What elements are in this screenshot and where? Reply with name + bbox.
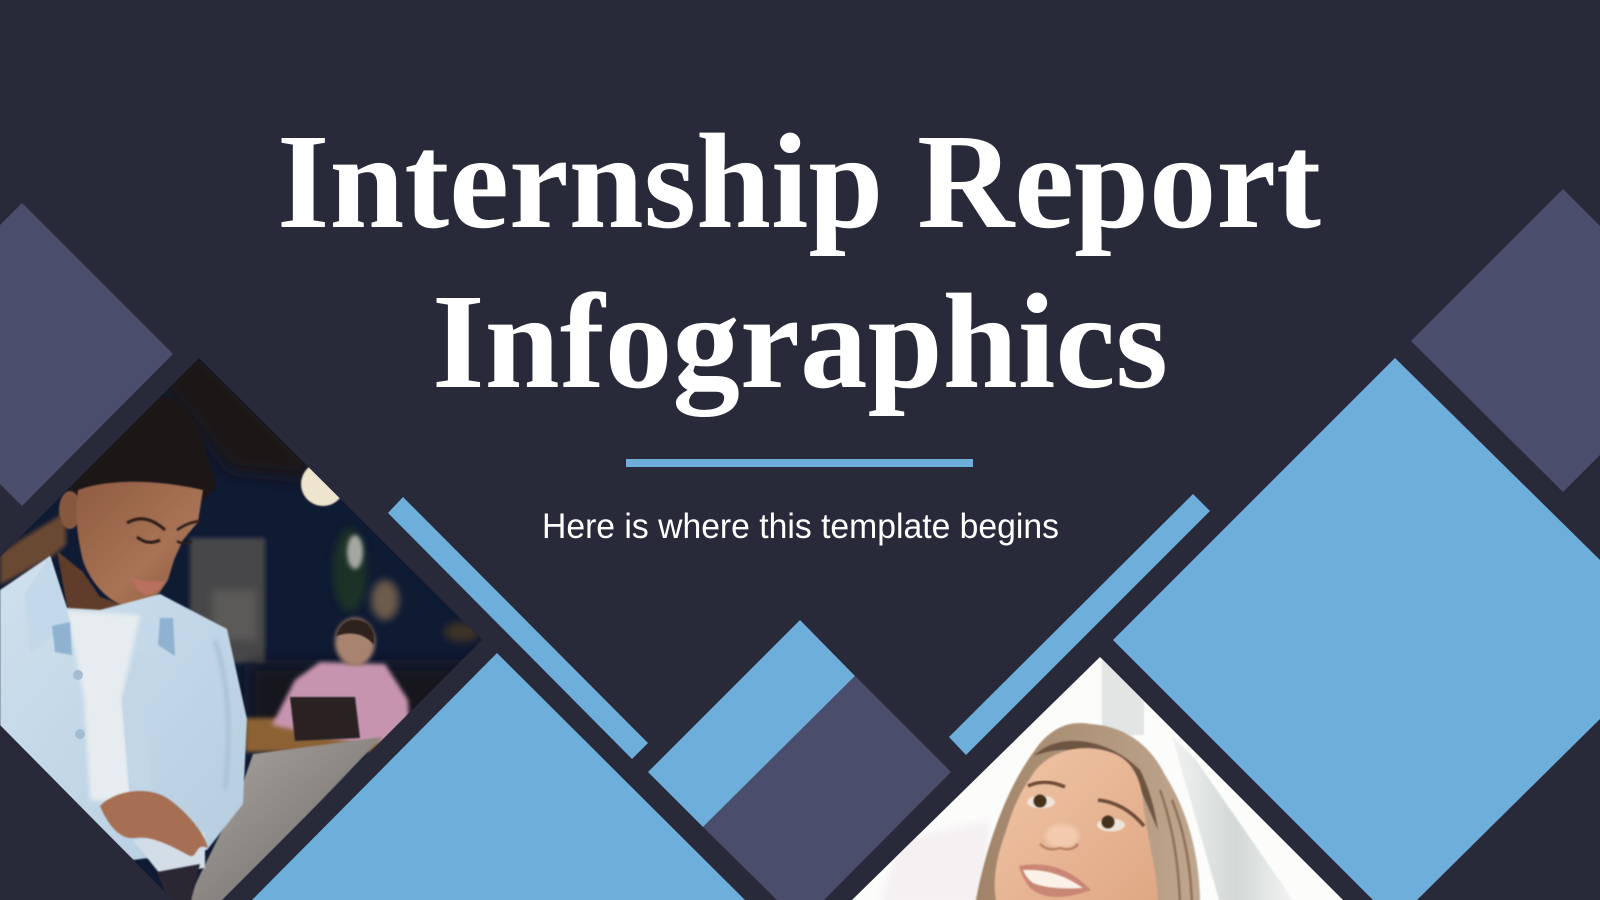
- right blue stripe: [949, 494, 1210, 755]
- right blue diamond: [1113, 358, 1600, 900]
- subtitle: Here is where this template begins: [542, 507, 1059, 546]
- hand: [100, 791, 208, 856]
- face: [76, 482, 203, 606]
- sleeve cuff: [133, 832, 205, 874]
- center blue diamond segment: [648, 620, 855, 827]
- smile: [1019, 864, 1091, 897]
- title underline: [626, 459, 973, 467]
- neck: [57, 552, 122, 611]
- ponytail: [0, 512, 66, 585]
- left purple diamond: [0, 203, 173, 506]
- hair: [60, 397, 217, 520]
- face: [995, 748, 1158, 900]
- title line 2: Infographics: [432, 267, 1168, 417]
- shirt: [0, 556, 247, 860]
- title: [277, 107, 1321, 417]
- right purple diamond: [1411, 189, 1600, 492]
- title line 1: Internship Report: [277, 107, 1321, 257]
- ear: [59, 491, 81, 529]
- photo: woman working at laptop: [0, 350, 490, 900]
- photo: smiling woman looking up: [840, 650, 1360, 900]
- keyboard: [157, 864, 200, 900]
- hair: [975, 723, 1200, 900]
- left blue stripe: [388, 497, 648, 759]
- left blue triangle: [252, 653, 745, 900]
- center purple diamond segment: [703, 676, 951, 900]
